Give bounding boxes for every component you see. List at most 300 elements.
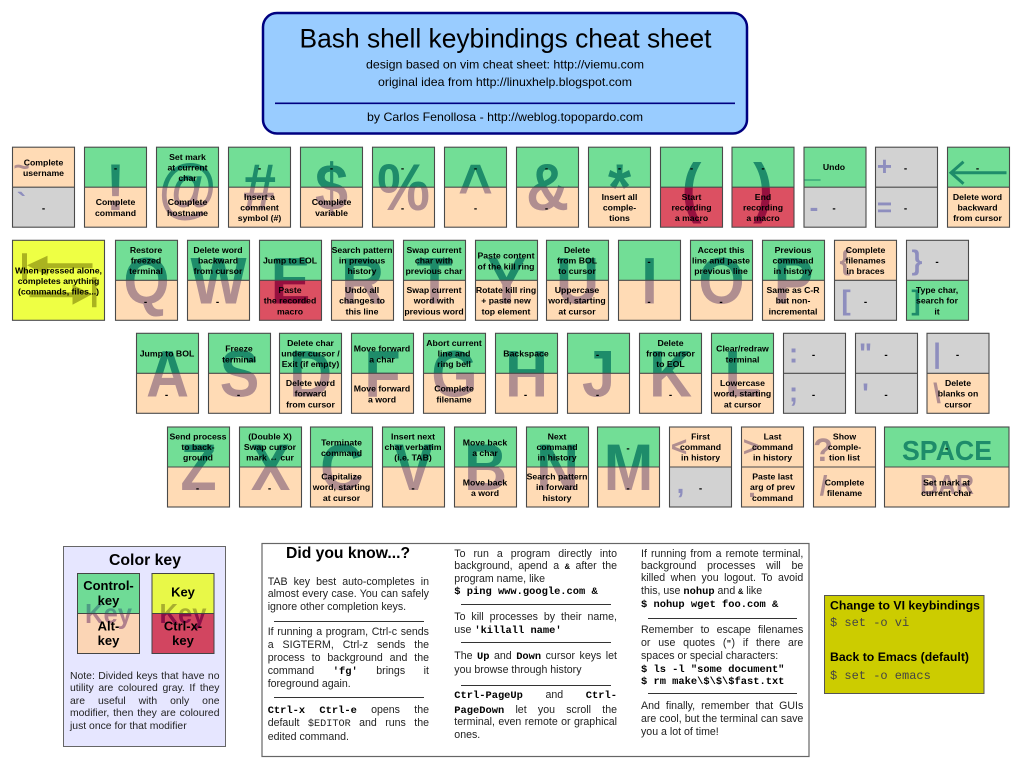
swatch: key and ctrl-x: key <box>172 633 195 648</box>
key: close paren: - <box>761 164 765 175</box>
key: U: from BOL <box>557 256 598 266</box>
key: dollar: $ <box>315 151 348 225</box>
key: dollar <box>300 147 362 227</box>
author line: by Carlos Fenollosa - http://weblog.topopardo.com <box>367 110 643 124</box>
key: exclamation: ! <box>106 151 125 225</box>
key: S: - <box>237 390 240 401</box>
tips column 1: almost every case. You can safely <box>268 588 429 600</box>
title: Bash shell keybindings cheat sheet <box>300 24 712 54</box>
key: greater-than and period: command <box>752 442 793 452</box>
key: tilde: Complete <box>24 157 63 167</box>
key: K <box>640 333 702 413</box>
key: less-than and comma: < <box>671 431 687 462</box>
key: space bar: - <box>945 444 948 454</box>
key: A <box>136 333 198 413</box>
key: pipe and backslash: Delete <box>945 378 971 388</box>
key: A: - <box>165 390 168 401</box>
key: G: filename <box>436 394 472 404</box>
tips column 3: If running from a remote terminal, <box>641 548 803 560</box>
key: hash: # <box>243 151 276 225</box>
key: quotes: - <box>884 390 888 401</box>
key: dollar: variable <box>315 208 348 218</box>
credit line: design: design based on vim cheat sheet: http://viemu.com <box>366 57 644 71</box>
tips column 3: Remember to escape filenames <box>641 624 803 636</box>
key: quotes: - <box>884 350 888 361</box>
key: D: Delete char <box>287 338 335 348</box>
key: Y: top element <box>482 306 530 316</box>
key: open brace and bracket: { <box>840 244 851 275</box>
key: O <box>690 240 752 320</box>
key: less-than and comma: First <box>691 432 710 442</box>
panel: color key <box>64 547 225 746</box>
key: O: Accept this <box>698 245 745 255</box>
key: space bar <box>884 427 1009 507</box>
key: tab: (commands, files...) <box>18 286 99 296</box>
key: C: Capitalize <box>321 472 362 482</box>
tips column 3: $ rm make\$\$\$fast.txt <box>641 676 784 688</box>
key: at: Complete <box>168 197 207 207</box>
key: plus and equals: = <box>877 192 892 222</box>
key: L: terminal <box>726 354 759 364</box>
key: tab: When pressed alone, <box>15 265 102 275</box>
key: hash: Insert a <box>244 192 275 202</box>
key: Y: + paste new <box>481 296 531 306</box>
key: F <box>352 333 414 413</box>
key: hash: comment <box>240 202 279 212</box>
key: N: history <box>543 493 572 503</box>
key: W: Delete word <box>193 245 243 255</box>
key: caret: - <box>474 164 477 175</box>
key: question mark and slash: / <box>820 470 828 501</box>
tips column 1: command 'fg' brings it <box>268 664 429 678</box>
key: close brace and bracket <box>906 240 968 320</box>
tips column 1 <box>268 576 429 742</box>
tips column 2: program name, like <box>454 573 545 585</box>
key: space bar: BAR <box>920 469 974 500</box>
key: R <box>332 240 394 320</box>
key: question mark and slash: filename <box>827 488 862 498</box>
key: F: Move forward <box>354 384 410 394</box>
key: greater-than and period: Last <box>764 432 782 442</box>
key: underscore and minus: - <box>810 192 818 222</box>
key: T: Swap current <box>406 285 462 295</box>
key: question mark and slash: Show <box>833 432 856 442</box>
key: O: previous line <box>694 266 748 276</box>
key: greater-than and period: Paste last <box>752 472 793 482</box>
key: B: a word <box>471 488 499 498</box>
tips column 1: If running a program, Ctrl-c sends <box>268 626 429 638</box>
key: Z: Z <box>180 431 217 505</box>
key: percent: - <box>401 204 404 215</box>
key: hash <box>228 147 290 227</box>
tips column 1: ignore other completion keys. <box>268 601 406 613</box>
tips column 3: this, use nohup and & like <box>641 585 762 598</box>
swatch: key and ctrl-x: Ctrl-x- <box>164 619 202 634</box>
key: B: Move back <box>463 477 507 487</box>
key: pipe and backslash <box>927 333 989 413</box>
key: C: C <box>320 431 363 505</box>
key: D: Delete word <box>286 378 335 388</box>
key: tilde: ~ <box>13 151 30 182</box>
swatch: control and alt: Alt- <box>98 619 119 634</box>
key: less-than and comma: - <box>699 484 702 494</box>
key: N: in forward <box>536 482 578 492</box>
key: V: (i.e. TAB) <box>394 453 432 463</box>
key: L: word, starting <box>713 388 771 398</box>
key: question mark and slash: tion list <box>829 453 860 463</box>
key: S: S <box>220 337 259 411</box>
key: X <box>240 427 302 507</box>
tips column 2: PageDown let you scroll the <box>454 704 617 716</box>
key: T: char with <box>415 256 453 266</box>
emacs command: $ set -o emacs <box>830 669 931 683</box>
key: Z <box>168 427 230 507</box>
key: close paren: End <box>755 192 771 202</box>
key: colon and semicolon <box>784 333 846 413</box>
key: asterisk: tions <box>609 213 630 223</box>
key: Y: of the kill ring <box>478 261 534 271</box>
key: K: from cursor <box>646 348 695 358</box>
key: hash: symbol (#) <box>238 213 281 223</box>
vi command: $ set -o vi <box>830 616 909 630</box>
key: U: Delete <box>564 245 590 255</box>
key: V: Insert next <box>391 432 435 442</box>
swatch: key and ctrl-x: Key <box>171 585 196 600</box>
key: Q: - <box>144 297 147 308</box>
key: A: Jump to BOL <box>140 349 195 359</box>
tips column 2 <box>454 548 617 741</box>
key: B: a char <box>472 448 498 458</box>
key: P: Previous <box>775 245 812 255</box>
key: tilde <box>12 147 74 227</box>
key: T: Swap current <box>406 245 462 255</box>
tips column 2: terminal, even remote or graphical <box>454 716 617 728</box>
key: N <box>526 427 588 507</box>
key: plus and equals: - <box>904 204 907 215</box>
key: caret: ^ <box>458 151 493 225</box>
key: close brace and bracket: Type char, <box>916 285 958 295</box>
key: pipe and backslash: cursor <box>944 399 972 409</box>
tips column 3: spaces or special characters: <box>641 650 778 662</box>
key: X: - <box>268 484 271 494</box>
key: greater-than and period: command <box>752 493 793 503</box>
keyboard row 2 <box>12 240 968 320</box>
swatch: control and alt <box>78 574 140 654</box>
key: Y: Y <box>487 244 526 318</box>
key: Q: terminal <box>129 266 163 276</box>
key: H: - <box>524 390 527 401</box>
key: quotes: " <box>859 337 872 368</box>
swatch: key and ctrl-x: Key <box>160 598 207 629</box>
key: T <box>404 240 466 320</box>
key: V: char verbatim <box>385 442 442 452</box>
key: less-than and comma <box>670 427 732 507</box>
key: space bar: Set mark at <box>923 477 970 487</box>
key: exclamation: Complete <box>96 197 135 207</box>
tips column 1: TAB key best auto-completes in <box>268 576 429 588</box>
key: J: J <box>582 337 615 411</box>
key: A: A <box>146 337 189 411</box>
key: C: command <box>321 448 362 458</box>
key: B: B <box>464 431 507 505</box>
key: Z: ground <box>183 453 213 463</box>
key: question mark and slash <box>813 427 876 507</box>
key: colon and semicolon: - <box>812 390 815 401</box>
key: K: Delete <box>657 338 684 348</box>
tips column 2: $ ping www.google.com & <box>454 586 598 598</box>
key: H <box>496 333 558 413</box>
key: underscore and minus <box>804 147 866 227</box>
color key title: Color key <box>109 552 181 569</box>
key: N: command <box>536 442 578 452</box>
key: S <box>208 333 270 413</box>
key: J: - <box>596 390 599 401</box>
swatch: control and alt: key <box>98 593 120 608</box>
key: C: at cursor <box>323 493 361 503</box>
key: open brace and bracket: in braces <box>846 266 885 276</box>
key: S: Freeze <box>225 344 253 354</box>
key: open brace and bracket: [ <box>841 284 851 315</box>
tips column 2: To run a program directly into <box>454 548 617 560</box>
key: plus and equals: + <box>877 151 892 181</box>
key: ampersand: - <box>545 204 548 215</box>
key: I <box>618 240 680 320</box>
key: space bar: SPACE <box>902 435 992 466</box>
emacs heading: Back to Emacs (default) <box>830 650 969 664</box>
key: Z: - <box>196 484 199 494</box>
key: close brace and bracket: it <box>934 306 940 316</box>
tips column 3: $ ls -l "some document" <box>641 664 784 676</box>
key: open brace and bracket <box>834 240 896 320</box>
key: V <box>382 427 444 507</box>
did you know title: Did you know...? <box>286 545 410 562</box>
key: greater-than and period <box>742 427 804 507</box>
key: underscore and minus: _ <box>804 152 821 183</box>
key: Q: Restore <box>130 245 162 255</box>
tips column 3: you a lot of time! <box>641 726 719 738</box>
key: R: history <box>348 266 377 276</box>
key: C: word, starting <box>312 482 370 492</box>
tips column 3: $ nohup wget foo.com & <box>641 598 778 610</box>
key: at: @ <box>159 151 216 225</box>
key: K: K <box>649 337 692 411</box>
keyboard row 3 <box>136 333 989 413</box>
key: X: Swap cursor <box>244 442 297 452</box>
key: tab: completes anything <box>18 276 99 286</box>
key: ampersand: & <box>526 151 569 225</box>
tips column 3: or use quotes (") if there are <box>641 637 803 649</box>
key: S: terminal <box>222 354 256 364</box>
key: Y <box>476 240 538 320</box>
key: tilde: username <box>23 168 64 178</box>
vi heading: Change to VI keybindings <box>830 598 980 612</box>
key: Y: Paste content <box>478 251 535 261</box>
key: J <box>568 333 630 413</box>
key: E: E <box>271 244 310 318</box>
key: N: Search pattern <box>527 472 587 482</box>
key: M: M <box>604 431 653 505</box>
key: T: previous char <box>406 266 463 276</box>
key: less-than and comma: in history <box>681 453 720 463</box>
panel: vi/emacs mode commands <box>824 596 984 694</box>
key: T: T <box>416 244 453 318</box>
tips column 1: process to background and the <box>268 652 429 664</box>
key: pipe and backslash: blanks on <box>938 388 978 398</box>
key: less-than and comma: , <box>677 468 684 499</box>
key: percent: % <box>377 151 430 225</box>
key: ampersand <box>516 147 578 227</box>
color key note: utility are coloured gray. If they <box>70 683 220 694</box>
key: Q: freezed <box>131 256 161 266</box>
key: close brace and bracket: search for <box>916 296 959 306</box>
key: O: - <box>719 297 723 308</box>
key: I: - <box>647 257 651 268</box>
tips column 3: killed when you logout. To avoid <box>641 572 803 584</box>
key: U: U <box>556 244 599 318</box>
key: backspace arrow <box>948 147 1010 227</box>
key: P: but non- <box>776 296 810 306</box>
tips column 1: default $EDITOR and runs the <box>268 717 429 730</box>
swatch: control and alt: Control- <box>83 578 134 593</box>
key: open paren: Start <box>682 192 702 202</box>
key: G: Abort current <box>426 338 482 348</box>
key: colon and semicolon: - <box>812 350 815 361</box>
key: open paren: recording <box>671 202 712 212</box>
key: F: a word <box>368 394 396 404</box>
key: E <box>260 240 322 320</box>
key: K: - <box>669 390 672 401</box>
panel: did you know frame <box>262 544 809 756</box>
tips column 2: Ctrl-PageUp and Ctrl- <box>454 689 617 702</box>
key: B <box>454 427 516 507</box>
key: L <box>712 333 774 413</box>
key: Y: Rotate kill ring <box>476 285 536 295</box>
key: greater-than and period: . <box>748 472 756 503</box>
key: U: at cursor <box>558 306 596 316</box>
key: I: I <box>641 244 658 318</box>
swatch: key and ctrl-x <box>152 574 214 654</box>
key: W: from cursor <box>194 266 243 276</box>
key: pipe and backslash: | <box>933 337 941 368</box>
tips column 2: you browse through history <box>454 664 582 676</box>
key: D: Exit (if empty) <box>282 359 339 369</box>
key: close paren: a macro <box>746 213 780 223</box>
key: E: the recorded <box>264 296 316 306</box>
key: question mark and slash: comple- <box>828 442 861 452</box>
key: P: incremental <box>769 306 817 316</box>
key: asterisk: comple- <box>603 202 636 212</box>
key: exclamation <box>84 147 146 227</box>
key: C <box>310 427 372 507</box>
keyboard row 1 <box>12 147 1010 227</box>
key: open paren <box>660 147 722 227</box>
key: T: word with <box>413 296 454 306</box>
key: asterisk: * <box>608 151 632 225</box>
key: underscore and minus: - <box>832 204 836 215</box>
color key note: are useful with only one <box>70 696 220 707</box>
key: open paren: a macro <box>675 213 708 223</box>
tips column 3: are cool, but the terminal can save <box>641 713 803 725</box>
key: close paren: recording <box>743 202 783 212</box>
key: R: Undo all <box>345 285 379 295</box>
tips column 1: edited command. <box>268 730 349 742</box>
tips column 3 <box>641 548 803 738</box>
key: at: char <box>178 173 197 183</box>
key: space bar: current char <box>921 488 972 498</box>
key: exclamation: - <box>114 164 117 175</box>
key: M: - <box>626 444 630 454</box>
key: close brace and bracket: - <box>935 257 939 268</box>
key: T: previous word <box>404 306 464 316</box>
key: D: under cursor / <box>281 348 340 358</box>
key: F: a char <box>369 354 395 364</box>
tips column 2: The Up and Down cursor keys let <box>454 650 617 663</box>
key: O: O <box>698 244 745 318</box>
color key note: just once for that modifier <box>70 721 187 732</box>
key: Q: Q <box>123 244 170 318</box>
key: L: Clear/redraw <box>716 344 769 354</box>
tips column 1: a SIGTERM, Ctrl-z sends the <box>268 639 429 651</box>
key: P: in history <box>773 266 813 276</box>
key: P <box>762 240 824 320</box>
key: G: ring bell <box>437 359 471 369</box>
key: R: this line <box>346 306 379 316</box>
key: L: at cursor <box>724 399 762 409</box>
tips column 2: background, apend a & after the <box>454 560 617 572</box>
key: at: at current <box>167 162 208 172</box>
key: U <box>546 240 608 320</box>
key: R: Search pattern <box>332 245 392 255</box>
tips column 3: background processes will be <box>641 560 803 572</box>
key: Q <box>116 240 178 320</box>
key: greater-than and period: in history <box>753 453 792 463</box>
key: question mark and slash: ? <box>813 432 833 468</box>
key: at: hostname <box>167 208 208 218</box>
color key note <box>70 671 220 732</box>
key: open brace and bracket: filenames <box>845 256 886 266</box>
key: G: G <box>431 337 478 411</box>
key: V: - <box>411 484 415 494</box>
key: D <box>280 333 342 413</box>
key: tilde: - <box>42 204 45 215</box>
key: G: line and <box>438 348 470 358</box>
key: quotes <box>856 333 918 413</box>
key: D: D <box>289 337 332 411</box>
key: C: Terminate <box>321 437 362 447</box>
key: tilde: ` <box>17 187 26 218</box>
key: close paren: ) <box>753 151 773 225</box>
key: backspace arrow: Delete word <box>953 192 1002 202</box>
key: less-than and comma: command <box>680 442 721 452</box>
key: F: F <box>364 337 401 411</box>
key: percent: - <box>401 164 404 175</box>
key: G: Complete <box>434 384 474 394</box>
key: close paren <box>732 147 794 227</box>
key: U: to cursor <box>558 266 596 276</box>
key: W: W <box>190 244 247 318</box>
key: caret: - <box>474 204 477 215</box>
tips column 2: ones. <box>454 729 480 741</box>
tips column 1: foreground again. <box>268 678 351 690</box>
swatch: control and alt: Key <box>85 598 132 629</box>
key: R: changes to <box>339 296 385 306</box>
key: question mark and slash: Complete <box>825 477 864 487</box>
key: R: in previous <box>339 256 385 266</box>
tips column 2: To kill processes by their name, <box>454 611 617 623</box>
key: L: Lowercase <box>720 378 765 388</box>
key: greater-than and period: > <box>743 431 759 462</box>
key: J: - <box>596 350 599 361</box>
